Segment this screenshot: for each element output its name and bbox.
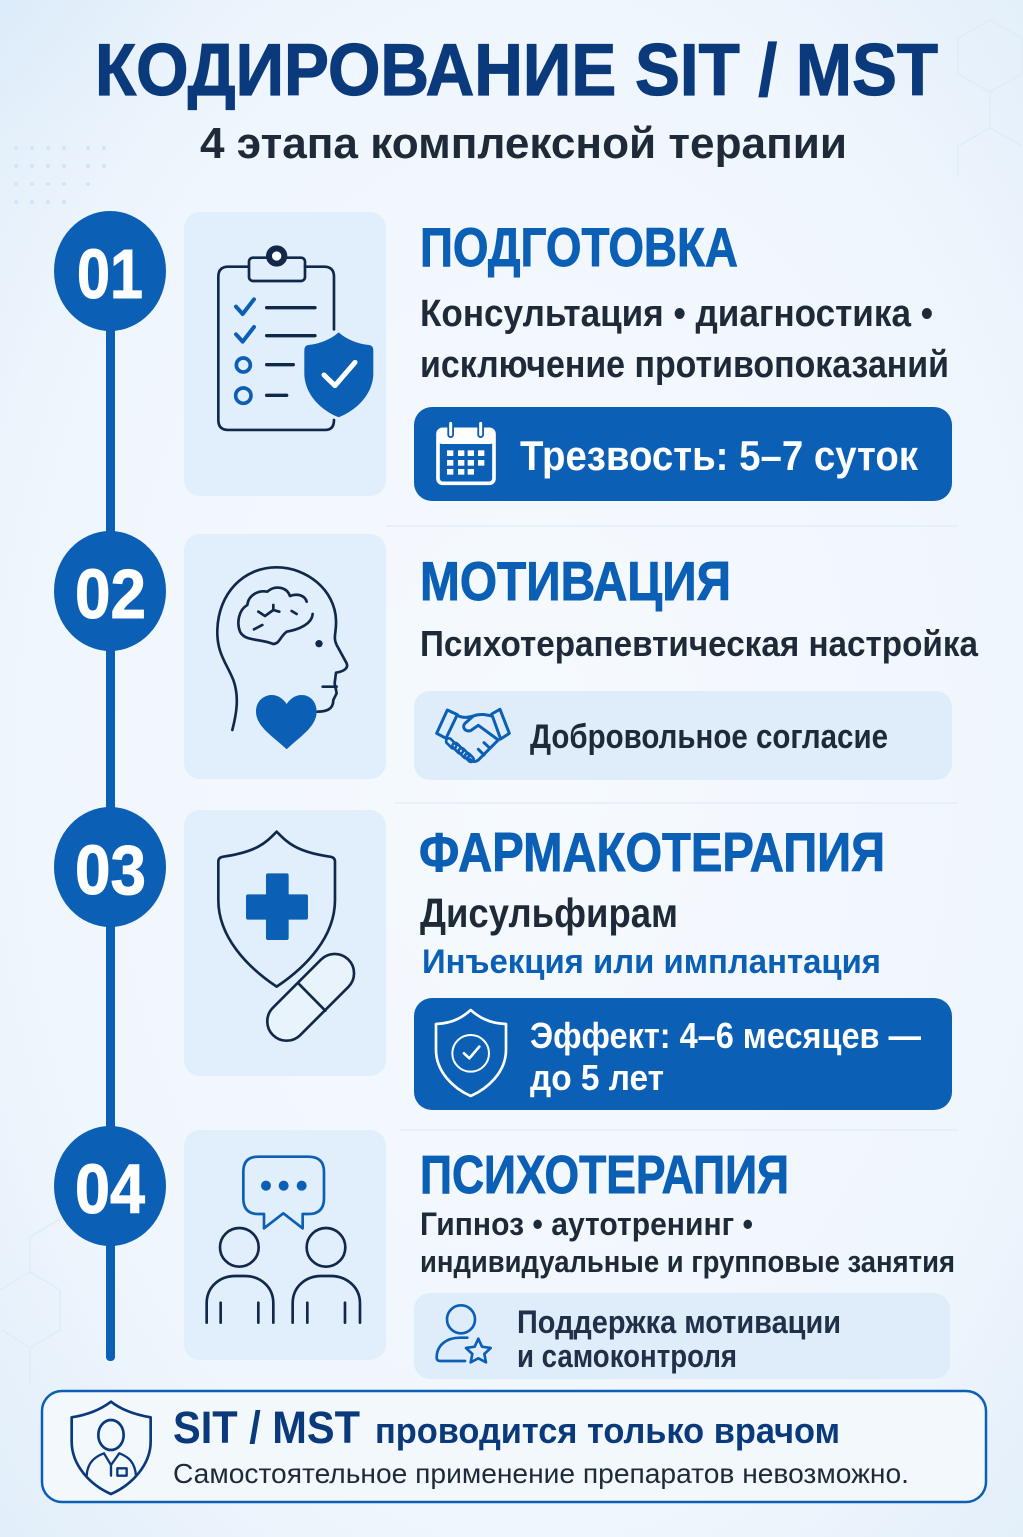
description: Гипноз • аутотренинг •	[420, 1206, 753, 1242]
subtitle: 4 этапа комплексной терапии	[200, 119, 847, 168]
heading: ПСИХОТЕРАПИЯ	[420, 1145, 789, 1205]
callout: sobriety	[414, 407, 952, 501]
icon: handshake	[437, 709, 509, 763]
callout: effect duration: до 5 лет	[530, 1057, 664, 1098]
step number 03: 03	[75, 831, 146, 909]
timeline line	[106, 271, 115, 1361]
step number 01	[54, 211, 166, 331]
icon: calendar	[438, 423, 494, 483]
footer heading: проводится только врачом	[375, 1410, 840, 1451]
footer heading: SIT / MST	[173, 1402, 360, 1453]
step number 04: 04	[75, 1150, 145, 1228]
heading: ФАРМАКОТЕРАПИЯ	[419, 821, 885, 883]
description: исключение противопоказаний	[420, 344, 949, 386]
step number 01: 01	[77, 235, 143, 313]
drug name: Дисульфирам	[420, 890, 678, 936]
icon panel: shield and capsule	[184, 810, 386, 1076]
icon panel: two people with speech bubble	[184, 1130, 386, 1360]
step number 02: 02	[75, 555, 146, 633]
footer heading	[173, 1402, 840, 1453]
description: Психотерапевтическая настройка	[420, 623, 979, 664]
icon: shield with check	[436, 1010, 506, 1096]
icon panel: head with brain and heart	[184, 534, 386, 779]
footer note: Самостоятельное применение препаратов невозможно.	[173, 1458, 909, 1489]
callout: support	[414, 1293, 950, 1379]
step 1: preparation	[54, 211, 952, 501]
callout: effect duration: Эффект: 4–6 месяцев —	[530, 1015, 921, 1056]
footer notice	[42, 1391, 986, 1502]
description	[420, 293, 949, 386]
title: КОДИРОВАНИЕ SIT / MST	[95, 30, 938, 111]
callout: sobriety: Трезвость: 5–7 суток	[520, 432, 919, 479]
heading: ПОДГОТОВКА	[420, 216, 738, 278]
step number 02	[54, 531, 166, 651]
callout: support: Поддержка мотивации	[517, 1304, 841, 1340]
step 2: motivation	[54, 531, 979, 780]
icon: person with star	[437, 1305, 491, 1362]
callout: voluntary consent	[414, 691, 952, 780]
step number 04	[54, 1126, 166, 1246]
callout: support: и самоконтроля	[517, 1338, 737, 1374]
administration route: Инъекция или имплантация	[422, 943, 881, 981]
icon panel: clipboard with shield	[184, 212, 386, 496]
icon: doctor in shield	[72, 1402, 151, 1494]
callout: effect duration	[414, 998, 952, 1110]
step number 03	[54, 807, 166, 927]
description: Консультация • диагностика •	[420, 293, 933, 335]
description	[420, 1206, 955, 1279]
step 3: pharmacotherapy	[54, 807, 952, 1110]
heading: МОТИВАЦИЯ	[420, 550, 731, 612]
step 4: psychotherapy	[54, 1126, 955, 1379]
callout: voluntary consent: Добровольное согласие	[530, 718, 888, 756]
description: индивидуальные и групповые занятия	[420, 1244, 955, 1279]
